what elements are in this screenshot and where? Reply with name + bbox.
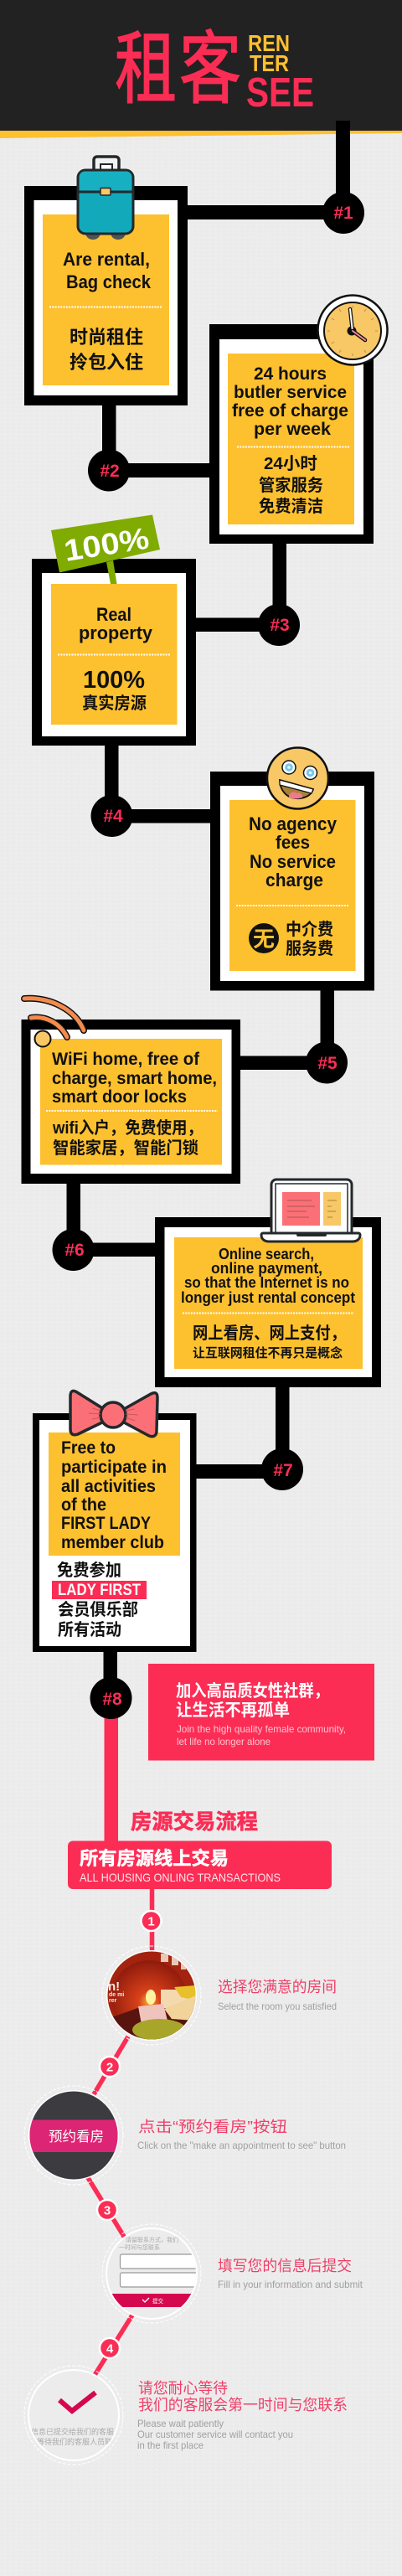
card 7 English text: of the	[61, 1495, 106, 1515]
card 4 text	[236, 813, 349, 958]
badge #3: #3	[270, 616, 290, 635]
connector: card 6 to card 7	[196, 1387, 290, 1479]
step 1 badge: 1	[147, 1915, 155, 1928]
connector: header to card 1	[188, 121, 350, 219]
panel English text	[177, 1723, 346, 1747]
badge #7	[261, 1448, 303, 1490]
card 4: no agency fees	[210, 747, 374, 990]
step 4 badge	[100, 2338, 120, 2358]
step 4 badge: 4	[106, 2342, 114, 2356]
connector: card 5 to card 6	[67, 1184, 155, 1257]
card 7 Chinese text	[52, 1560, 147, 1639]
panel Chinese text: 加入高品质女性社群，	[176, 1680, 329, 1701]
icon: smiling face	[267, 747, 328, 809]
card 1 text: Bag check	[66, 271, 152, 292]
badge #5: #5	[317, 1054, 338, 1073]
card 2 text: butler service	[234, 383, 347, 402]
card 4 text: 无	[253, 927, 275, 952]
card 6 text: 网上看房、网上支付，	[193, 1324, 346, 1343]
heading: transaction process: 房源交易流程	[131, 1810, 258, 1834]
card 7 English text: Free to	[61, 1438, 116, 1458]
card 2 text: 24 hours	[254, 364, 327, 384]
icon: green 100% sign: 100%	[61, 520, 152, 568]
card 2 text: free of charge	[232, 401, 348, 421]
card 7 English text: FIRST LADY	[61, 1514, 151, 1533]
connector: card 1 to card 2	[102, 405, 209, 478]
connector: badge 8 to banner	[104, 1713, 118, 1843]
card 1 text: 拎包入住	[70, 352, 143, 373]
card 5 text: 智能家居，智能门锁	[53, 1138, 198, 1158]
step 4 text: in the first place	[137, 2439, 204, 2451]
card 7 English text: participate in	[61, 1458, 167, 1477]
panel Chinese text: 让生活不再孤单	[176, 1700, 290, 1720]
step 2 image: appointment button	[24, 2086, 123, 2185]
card 2 text: 免费清洁	[259, 497, 323, 516]
banner: all housing online: ALL HOUSING ONLING TRANSACTIONS	[80, 1871, 281, 1884]
badge #6: #6	[64, 1241, 85, 1260]
step 3 text: 填写您的信息后提交	[218, 2258, 352, 2274]
connector: card 3 to card 4	[105, 746, 210, 823]
badge #7: #7	[273, 1461, 293, 1480]
card 6 text: so that the Internet is no	[184, 1274, 349, 1291]
card 2 text: 24小时	[264, 454, 317, 473]
logo: RENTER SEE: REN	[248, 30, 290, 56]
badge #1	[322, 192, 364, 234]
panel English text: Join the high quality female community,	[177, 1723, 346, 1735]
card 6: online search	[155, 1180, 381, 1387]
connector: card 4 to card 5	[240, 990, 334, 1070]
card 1 text: 时尚租住	[70, 327, 143, 348]
card 6 text: longer just rental concept	[181, 1289, 355, 1306]
logo: Chinese name: 租	[115, 6, 177, 120]
card 3: real property	[32, 514, 196, 746]
card 3 text: 100%	[83, 667, 145, 694]
step 3 badge	[97, 2200, 117, 2220]
badge #3	[258, 604, 300, 646]
logo: RENTER SEE: TER	[250, 50, 289, 76]
badge #2	[88, 449, 130, 491]
icon: clock	[318, 295, 387, 365]
step 1 text: 选择您满意的房间	[218, 1979, 337, 1995]
step 2 text	[137, 2119, 346, 2151]
step 1 text: Select the room you satisfied	[218, 2000, 337, 2012]
card 5 text: wifi入户，免费使用，	[52, 1118, 203, 1138]
connector: card 2 to card 3	[196, 544, 286, 632]
card 6 text: online payment,	[211, 1260, 322, 1277]
logo: Chinese name	[115, 6, 241, 120]
step 4 text: 请您耐心等待	[138, 2380, 228, 2397]
step 4 text: Please wait patiently	[137, 2418, 224, 2429]
card 7 Chinese text: 会员俱乐部	[58, 1600, 138, 1619]
card 2 text: 管家服务	[259, 475, 323, 495]
badge #8: #8	[102, 1690, 122, 1709]
step 1 image: bedroom: rer	[109, 1998, 117, 2004]
card 7 Chinese text: 免费参加	[57, 1560, 121, 1580]
card 3 text: property	[79, 622, 153, 643]
step 4 text: 我们的客服会第一时间与您联系	[138, 2397, 348, 2413]
step 2 badge: 2	[106, 2061, 113, 2074]
step 4 image: check mark: 信息已提交给我们的客服	[31, 2427, 114, 2436]
logo: RENTER SEE	[246, 30, 314, 116]
step 3 text	[218, 2258, 363, 2290]
badge #4: #4	[103, 807, 123, 826]
panel: female community	[148, 1664, 374, 1761]
logo: Chinese name: 客	[179, 6, 241, 120]
icon: wifi	[24, 999, 84, 1047]
banner: all housing online	[68, 1841, 332, 1889]
card 6 text: 让互联网租住不再只是概念	[193, 1345, 343, 1360]
card 7 English text	[61, 1438, 167, 1552]
step 1 image: bedroom: de mi	[109, 1992, 124, 1998]
card 4 text: charge	[265, 870, 323, 891]
card 1 text: Are rental,	[63, 249, 150, 270]
card 2 text	[232, 364, 350, 516]
card 7 Chinese text: 所有活动	[58, 1620, 121, 1639]
step 1 image: bedroom	[102, 1946, 201, 2045]
step 3 badge: 3	[104, 2203, 111, 2218]
icon: suitcase	[78, 157, 133, 240]
badge #1: #1	[333, 204, 353, 223]
panel English text: let life no longer alone	[177, 1736, 271, 1747]
card 4 text: No service	[250, 851, 336, 872]
icon: green 100% sign	[51, 514, 160, 584]
card 5 text: smart door locks	[52, 1087, 187, 1107]
step 3 image: form: 一时间与您联系	[119, 2243, 160, 2251]
card 1: bag check	[24, 157, 188, 405]
card 4 text: 中介费	[286, 920, 333, 939]
step 1 badge	[141, 1911, 161, 1931]
banner: all housing online: 所有房源线上交易	[80, 1848, 229, 1869]
step 4 image: check mark: 等待我们的客服人员联系	[37, 2437, 120, 2446]
card 7 Chinese text: LADY FIRST	[58, 1582, 141, 1599]
step 4 image: check mark	[24, 2366, 123, 2465]
step 2 text: Click on the "make an appointment to see" button	[137, 2140, 346, 2151]
badge #5	[306, 1042, 348, 1084]
card 5: wifi home	[22, 999, 240, 1184]
connector: card 7 to badge 8	[104, 1652, 117, 1681]
card 5 text	[46, 1050, 218, 1158]
card 7 English text: all activities	[61, 1477, 156, 1496]
header band	[0, 0, 402, 138]
step 3 image: form: 请留联系方式，我们	[126, 2236, 178, 2243]
step 3 text: Fill in your information and submit	[218, 2279, 363, 2290]
badge #4	[90, 795, 132, 837]
badge #2: #2	[100, 462, 120, 481]
step 3 image: form: 提交	[152, 2297, 164, 2305]
step 2 image: appointment button: 预约看房	[49, 2129, 104, 2145]
step 4 text	[137, 2380, 348, 2451]
card 7 English text: member club	[61, 1533, 164, 1552]
badge #8	[90, 1677, 132, 1719]
process line	[87, 1889, 152, 2379]
card 6 text: Online search,	[219, 1246, 314, 1262]
card 4 text: 服务费	[286, 939, 333, 958]
card 6 text	[181, 1246, 355, 1360]
step 4 text: Our customer service will contact you	[137, 2429, 293, 2440]
card 5 text: WiFi home, free of	[52, 1050, 200, 1069]
card 1 text	[49, 249, 162, 373]
card 4 text: No agency	[249, 813, 338, 834]
card 4 text: fees	[276, 832, 310, 853]
card 7: first lady club	[33, 1391, 196, 1652]
step 2 text: 点击“预约看房”按钮	[138, 2119, 287, 2135]
card 5 text: charge, smart home,	[52, 1069, 217, 1088]
icon: laptop	[261, 1180, 360, 1242]
logo: RENTER SEE: SEE	[246, 70, 314, 116]
step 1 image: bedroom: n!	[108, 1980, 120, 1994]
card 2 text: per week	[254, 420, 331, 439]
panel Chinese text	[176, 1680, 329, 1720]
card 3 text: Real	[96, 604, 131, 625]
step 2 badge	[100, 2057, 120, 2077]
badge #6	[52, 1229, 94, 1271]
icon: bow tie	[70, 1391, 157, 1437]
step 1 text	[218, 1979, 337, 2012]
card 3 text	[58, 604, 171, 713]
card 3 text: 真实房源	[82, 693, 147, 713]
step 3 image: form	[102, 2224, 204, 2323]
card 2: butler service	[209, 295, 387, 544]
